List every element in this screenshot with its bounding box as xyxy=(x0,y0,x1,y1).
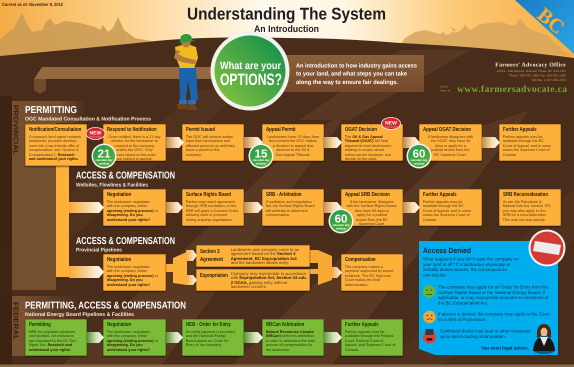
contact block: more at: xyxy=(440,88,451,92)
box: ogat decision xyxy=(341,124,403,161)
box: srb arbitration: If mediation and negotiation xyxy=(266,200,312,204)
box: compensation: determination. xyxy=(345,282,369,286)
corner flag: BC xyxy=(515,0,574,54)
badge: 60 days: 60 xyxy=(413,148,425,160)
box: appeal srb: they have 60 days to xyxy=(355,209,389,213)
title: An Introduction xyxy=(254,24,319,35)
callout: what are your options xyxy=(210,32,290,110)
box: negotiation provincial: disagreeing. Do you xyxy=(107,278,143,282)
box: appeal srb: review from the BC xyxy=(356,218,388,222)
box: federal negotiation: with the company, either xyxy=(107,334,147,338)
box: negotiation wellsites: Negotiation xyxy=(107,192,131,198)
icon: orange face xyxy=(423,311,436,323)
box: federal negotiation xyxy=(103,319,166,356)
box: srb reconsideration: SRB Reconsideration xyxy=(503,192,548,198)
badge: 60 days xyxy=(406,144,432,168)
badge: 21 days: window xyxy=(98,161,110,165)
badge: 15 days xyxy=(248,144,274,168)
intro banner: An introduction to how industry gains access xyxy=(296,62,418,70)
box: further appeals: available through the BC xyxy=(503,139,544,143)
box: nrcan arbitration: in order to determine the total xyxy=(266,339,315,343)
box: federal permitting: and facilities. Air emissions xyxy=(29,334,74,338)
box: neb order for entry: NEB - Order for Entry xyxy=(186,322,231,328)
badge: 21 days xyxy=(92,144,116,168)
box: notification: compensation- see "Access & xyxy=(29,148,78,152)
box: srb reconsideration: As per the Petroleum & xyxy=(503,200,542,204)
panel: provincial xyxy=(12,101,86,290)
contact block: Learn xyxy=(440,84,448,88)
box: neb order for entry: and the National Energy xyxy=(186,334,226,338)
box: srb arbitration: fail, the Surface Rights Board xyxy=(266,204,315,208)
box: federal negotiation: understand your rights? xyxy=(107,348,150,352)
panel: access denied: You need legal advice. xyxy=(481,346,529,350)
box: appeal ogat: judicial review from the xyxy=(431,148,470,152)
panel: access denied: Surface Rights Board or the National Energy Board, if xyxy=(438,290,546,295)
box: negotiation provincial: understand your rights? xyxy=(107,282,150,286)
badge: new ogat xyxy=(382,118,400,130)
box: negotiation provincial xyxy=(103,254,166,291)
badge: 60 days srb xyxy=(328,208,354,234)
box: permit issued xyxy=(182,124,244,161)
panel: provincial: PROVINCIAL xyxy=(12,105,18,156)
heading: access and compensation provincial: ACCESS & COMPENSATION xyxy=(76,236,175,247)
box: srb arbitration: will arbitrate to determine xyxy=(266,209,308,213)
box: respond: are subject to appeal. xyxy=(117,157,152,161)
box: negotiation wellsites: with the company, either xyxy=(107,204,147,208)
box: compensation: payment supported by expert xyxy=(345,269,393,273)
contact block: 10321 - 100 Avenue, Dawson Creek, BC V1G 2G5 xyxy=(497,69,566,73)
box: appeal ogat: If landowner disagrees with xyxy=(428,135,473,139)
box: permit issued: input from landowners and xyxy=(186,139,230,143)
orange connector: agreement to compensation xyxy=(309,250,332,285)
box: respond: window for the landowner to xyxy=(111,139,158,143)
contact block xyxy=(440,62,567,95)
contact block: Farmers' Advocacy Office xyxy=(495,62,566,68)
box: permit issued: The OGC will receive written xyxy=(186,135,233,139)
box: expropriation: with Expropriation Act, Section 34 sub. xyxy=(231,275,307,280)
box: respond: and/or the OGC. Only xyxy=(116,148,153,152)
box: federal permitting: Mgmt. Act. Research and xyxy=(29,343,72,347)
box: ogat decision: The Oil & Gas Appeal xyxy=(345,135,383,139)
arrows: provincial row xyxy=(69,250,342,285)
box: federal negotiation: agreeing (ending process) or xyxy=(107,339,158,343)
badge: 60 days srb: calendar day xyxy=(332,223,350,227)
box: permit issued: company. xyxy=(186,152,202,156)
box: section 3 agreement: Agreement xyxy=(200,257,223,263)
box: srb arbitration xyxy=(262,189,324,226)
box: appeal permit: Landowners have 15 days from xyxy=(267,135,319,139)
box: negotiation wellsites xyxy=(103,189,166,226)
box: respond: Once notified, there is a 21 day xyxy=(109,135,160,139)
badge: 21 days: calendar day xyxy=(95,158,113,162)
box: appeal srb: Supreme Court. xyxy=(359,222,385,226)
box: further appeals: cases the Supreme Court of xyxy=(503,148,550,152)
panel: access denied: for a Writ of Possession. xyxy=(438,317,487,322)
box: federal negotiation: Negotiation xyxy=(107,322,131,328)
contact block: Phone: 250-782-1088 Fax: 250-782-1090 xyxy=(509,74,566,78)
badge: 21 days: 21 xyxy=(98,148,111,160)
badge: 60 days: calendar day xyxy=(410,158,428,162)
callout: what are your options: What are your xyxy=(220,60,281,72)
box: federal negotiation: The landowner negotiates xyxy=(107,330,150,334)
box: srb reconsideration xyxy=(499,189,561,226)
box: appeal srb: with the Surface Rights Board, xyxy=(347,204,397,208)
box: nrcan arbitration: (NRCan) performs arbitration xyxy=(266,334,314,338)
box: federal permitting: are regulated by the BC Env. xyxy=(29,339,77,343)
box: ogat decision: arguments from landowners xyxy=(345,144,391,148)
icon: lawyer xyxy=(533,324,555,354)
box: expropriation: landowner consent. xyxy=(231,284,267,289)
box: federal further appeals: Court, Federal Court of xyxy=(345,339,383,343)
box: ogat decision: before permit issuance, and xyxy=(345,152,391,156)
corner flag: BC: BC xyxy=(533,4,568,39)
box: compensation: Court makes the final xyxy=(345,278,380,282)
box: surface rights board: Parties may reach agreement xyxy=(186,200,235,204)
box: compensation xyxy=(341,254,403,291)
heading: access and compensation wellsites xyxy=(76,170,175,188)
orange connector trunk xyxy=(56,165,69,277)
box: appeal permit xyxy=(262,124,324,161)
box: further appeals 2 xyxy=(419,189,482,226)
box: further appeals 2: Canada. xyxy=(423,218,437,222)
box: further appeals 2: Further appeals may be xyxy=(423,200,462,204)
box: federal further appeals: Further appeals may be xyxy=(345,330,384,334)
box: respond: issues raised at this point xyxy=(113,152,156,156)
panel: access denied: What happens if you don't want the company on xyxy=(423,256,519,262)
box: notification: Notification/Consultation xyxy=(29,127,81,133)
box: negotiation wellsites: agreeing (ending process) or xyxy=(107,209,158,213)
box: respond: Respond to Notification xyxy=(107,127,156,133)
box: neb order for entry: Board grants an Order for xyxy=(186,339,229,343)
box: further appeals 2: available through the BC xyxy=(423,204,464,208)
box: notification: Compensation"). Research xyxy=(29,152,75,156)
box: appeal permit: the moment the OGC makes xyxy=(269,139,317,143)
box: notification: ment info (may include offer of xyxy=(29,144,79,148)
box: appeal ogat: Appeal OGAT Decision xyxy=(423,127,471,133)
badge: 15 days: 15 xyxy=(255,148,268,160)
box: neb order for entry: An initial payment is provided, xyxy=(186,330,236,334)
box: compensation: The company makes a xyxy=(345,265,383,269)
box: respond xyxy=(103,124,166,161)
box: appeal ogat: the OGAT, they have 60 xyxy=(431,139,470,143)
box: compensation: evidence. The BC Supreme xyxy=(345,274,391,278)
box: further appeals: Further Appeals xyxy=(503,127,536,133)
box: negotiation provincial: with the company, either xyxy=(107,269,147,273)
orange connector: negotiation to agreement xyxy=(165,252,187,285)
figure: farmer xyxy=(174,34,198,110)
box: permit issued: Permit Issued xyxy=(186,127,215,133)
box: negotiation provincial: agreeing (ending process) or xyxy=(107,274,158,278)
heading: access and compensation provincial xyxy=(76,236,175,254)
arrows: permitting row xyxy=(166,137,500,148)
box: notification xyxy=(25,124,87,166)
box: ogat decision: Tribunal (OGAT) will hear xyxy=(345,139,388,143)
box: expropriation: 2 OGAA, gaining entry without xyxy=(231,280,287,285)
box: srb reconsideration: SRB for a reconsideration. xyxy=(503,213,547,217)
box: nrcan arbitration xyxy=(262,319,324,356)
box: further appeals: Court of Appeal, and in some xyxy=(503,144,551,148)
panel: access denied: applicable, or may expropriate pursuant to provisions of xyxy=(438,295,549,300)
box: appeal permit: Appeal Permit xyxy=(266,127,295,133)
badge: new xyxy=(86,128,105,140)
box: permit issued: affected persons up until they xyxy=(186,144,235,148)
badge: 60 days: window xyxy=(413,161,425,165)
box: negotiation provincial: The landowner negotiates xyxy=(107,265,150,269)
box: negotiation provincial: Negotiation xyxy=(107,257,131,263)
box: negotiation wellsites: understand your rights? xyxy=(107,218,150,222)
panel: access denied: The company may apply for an Order for Entry from the xyxy=(438,284,549,290)
box: srb reconsideration: Natural Gas Act, section 155, xyxy=(503,204,551,208)
box: section 3 agreement: Landowner and company come to an xyxy=(231,247,299,252)
panel: access denied: If access is denied, the company may apply to the Court xyxy=(438,312,551,316)
contact block: Toll-free: 1-877-503-2155 xyxy=(531,78,566,82)
panel: federal xyxy=(12,296,82,356)
box: nrcan arbitration: amount of compensation for xyxy=(266,343,312,347)
box: nrcan arbitration: Natural Resources Canada xyxy=(266,330,314,334)
box: further appeals 2: cases the Supreme Court of xyxy=(423,213,470,217)
box: surface rights board: allowing work to proceed xyxy=(186,213,227,217)
box: section 3 agreement xyxy=(196,245,310,267)
title: Understanding The System xyxy=(187,4,386,23)
heading: federal: PERMITTING, ACCESS & COMPENSATION xyxy=(25,300,186,312)
box: negotiation wellsites: disagreeing. Do you xyxy=(107,213,143,217)
box: further appeals xyxy=(499,124,561,161)
box: appeal permit: a decision to appeal that xyxy=(273,144,313,148)
box: surface rights board: through SRB mediation, or the xyxy=(186,204,236,208)
tree silhouettes right xyxy=(400,18,574,56)
box: surface rights board: during ongoing negotiations. xyxy=(186,218,233,222)
box: federal permitting: NEB Act regulates pipelines xyxy=(29,330,75,334)
box: nrcan arbitration: the landowner. xyxy=(266,348,290,352)
box: ogat decision: decide on the case. xyxy=(345,157,377,161)
box: neb order for entry: Entry to the company. xyxy=(186,343,222,347)
box: federal further appeals: Appeal, and Supreme Court of xyxy=(345,343,395,347)
box: respond: respond to the company xyxy=(114,144,155,148)
panel: access denied: Continued denial may lead to other measures xyxy=(440,328,532,334)
box: federal further appeals: available through the Federal xyxy=(345,334,393,338)
heading: permitting xyxy=(25,105,151,122)
box: srb arbitration: SRB - Arbitration xyxy=(266,192,301,198)
box: srb reconsideration: you may also apply to the xyxy=(503,209,545,213)
box: appeal ogat: days to apply for a xyxy=(435,144,466,148)
box: appeal permit: decision to the Oil & xyxy=(276,148,310,152)
badge: 60 days srb: window xyxy=(335,226,347,230)
title xyxy=(187,4,386,35)
box: appeal srb: Appeal SRB Decision xyxy=(345,192,390,198)
box: appeal ogat xyxy=(419,124,482,161)
box: federal permitting: Permitting xyxy=(29,322,51,328)
box: appeal srb xyxy=(341,189,403,226)
box: negotiation wellsites: The landowner negotiates xyxy=(107,200,150,204)
box: appeal ogat: BC Supreme Court. xyxy=(434,152,467,156)
box: section 3 agreement: Agreement, BC Expropriation Act xyxy=(231,256,297,261)
box: federal further appeals: Further Appeals xyxy=(345,322,378,328)
box: further appeals 2: Court of Appeal, and in some xyxy=(423,209,471,213)
badge: 15 days: calendar day xyxy=(252,158,270,162)
heading: federal: National Energy Board Pipelines & Facilities xyxy=(25,312,134,318)
box: further appeals: Further appeals may be xyxy=(503,135,542,139)
box: appeal srb: apply for a judicial xyxy=(357,213,387,217)
icon: green face xyxy=(423,285,435,298)
box: federal negotiation: disagreeing. Do you xyxy=(107,343,143,347)
callout: what are your options: OPTIONS? xyxy=(220,71,282,89)
badge: new ogat: NEW xyxy=(385,120,397,126)
heading: access and compensation wellsites: ACCESS & COMPENSATION xyxy=(76,170,175,182)
box: federal further appeals: Canada. xyxy=(345,348,359,352)
box: section 3 agreement: Section 3 xyxy=(200,249,220,255)
box: notification: landowner, provides develop- xyxy=(29,139,78,143)
box: appeal srb: If the landowner disagrees xyxy=(350,200,394,204)
tree silhouettes left xyxy=(0,13,156,58)
intro banner: to your land, and what steps you can take xyxy=(296,70,408,78)
panel: access denied: the BC Expropriation Act. xyxy=(438,300,488,305)
heading: federal xyxy=(25,300,186,318)
box: surface rights board: Surface Rights Board xyxy=(186,192,231,198)
heading: permitting: PERMITTING xyxy=(25,105,77,116)
contact block: www.farmersadvocate.ca xyxy=(457,85,567,95)
box: srb arbitration: compensation. xyxy=(266,213,290,217)
box: notification: Company's land agent contacts xyxy=(29,135,81,139)
heading: permitting: OGC Mandated Consultation & Notification Process xyxy=(25,116,151,122)
box: notification: and understand your rights. xyxy=(29,157,79,161)
date stamp: Current as of: November 8, 2012 xyxy=(2,2,63,7)
badge: 15 days: window xyxy=(255,161,267,165)
box: federal permitting xyxy=(25,319,87,356)
icon: no entry sign xyxy=(528,230,566,266)
box: expropriation xyxy=(196,269,310,291)
badge: new: NEW xyxy=(90,130,102,136)
intro banner: along the way to ensure fair dealings. xyxy=(296,79,398,86)
heading: access and compensation provincial: Provincial Pipelines xyxy=(76,248,122,254)
box: nrcan arbitration: NRCan Arbitration xyxy=(266,322,304,328)
box: ogat decision: relating to issues raised xyxy=(345,148,384,152)
panel: access denied: verbally denies access, the consequences xyxy=(423,267,508,272)
box: neb order for entry xyxy=(182,319,244,356)
brown ribbon xyxy=(34,67,215,94)
box: surface rights board: SRB will grant a Consent Order, xyxy=(186,209,239,213)
arrows: wellsites row xyxy=(69,202,420,213)
box: appeal permit: Gas Appeal Tribunal. xyxy=(276,152,310,156)
box: further appeals: Canada. xyxy=(503,152,517,156)
panel: access denied: up to and including incarceration. xyxy=(440,334,506,339)
panel: federal: FEDERAL xyxy=(12,302,18,341)
box: section 3 agreement: and the landowner allows entry. xyxy=(231,260,289,265)
box: federal permitting: understand your rights. xyxy=(29,348,71,352)
box: expropriation: Company may expropriate in accordance xyxy=(231,271,307,276)
panel: access denied: can include: xyxy=(423,272,447,277)
panel: access denied xyxy=(419,230,566,355)
box: section 3 agreement: agreement based on the Section 3 xyxy=(231,251,296,256)
arrows: federal row xyxy=(87,332,342,343)
icon: red face xyxy=(423,329,436,344)
box: federal further appeals xyxy=(341,319,403,356)
box: permit issued: issue a permit to the xyxy=(186,148,220,152)
panel: access denied: Access Denied xyxy=(423,246,471,255)
box: further appeals 2: Further Appeals xyxy=(423,192,456,198)
badge: 60 days srb: 60 xyxy=(335,214,347,226)
intro banner xyxy=(250,55,424,92)
box: compensation: Compensation xyxy=(345,257,375,263)
badge: new: effective date xyxy=(90,135,102,138)
box: srb reconsideration: This may not stop activity. xyxy=(503,218,546,222)
box: surface rights board xyxy=(182,189,244,226)
heading: access and compensation wellsites: Wellsites, Flowlines & Facilities xyxy=(76,182,148,188)
panel: access denied: your land at all? If a landowner physically or xyxy=(423,262,511,267)
box: ogat decision: OGAT Decision xyxy=(345,127,377,133)
box: expropriation: Expropriation xyxy=(200,273,228,279)
badge: new ogat: effective date xyxy=(385,125,398,128)
